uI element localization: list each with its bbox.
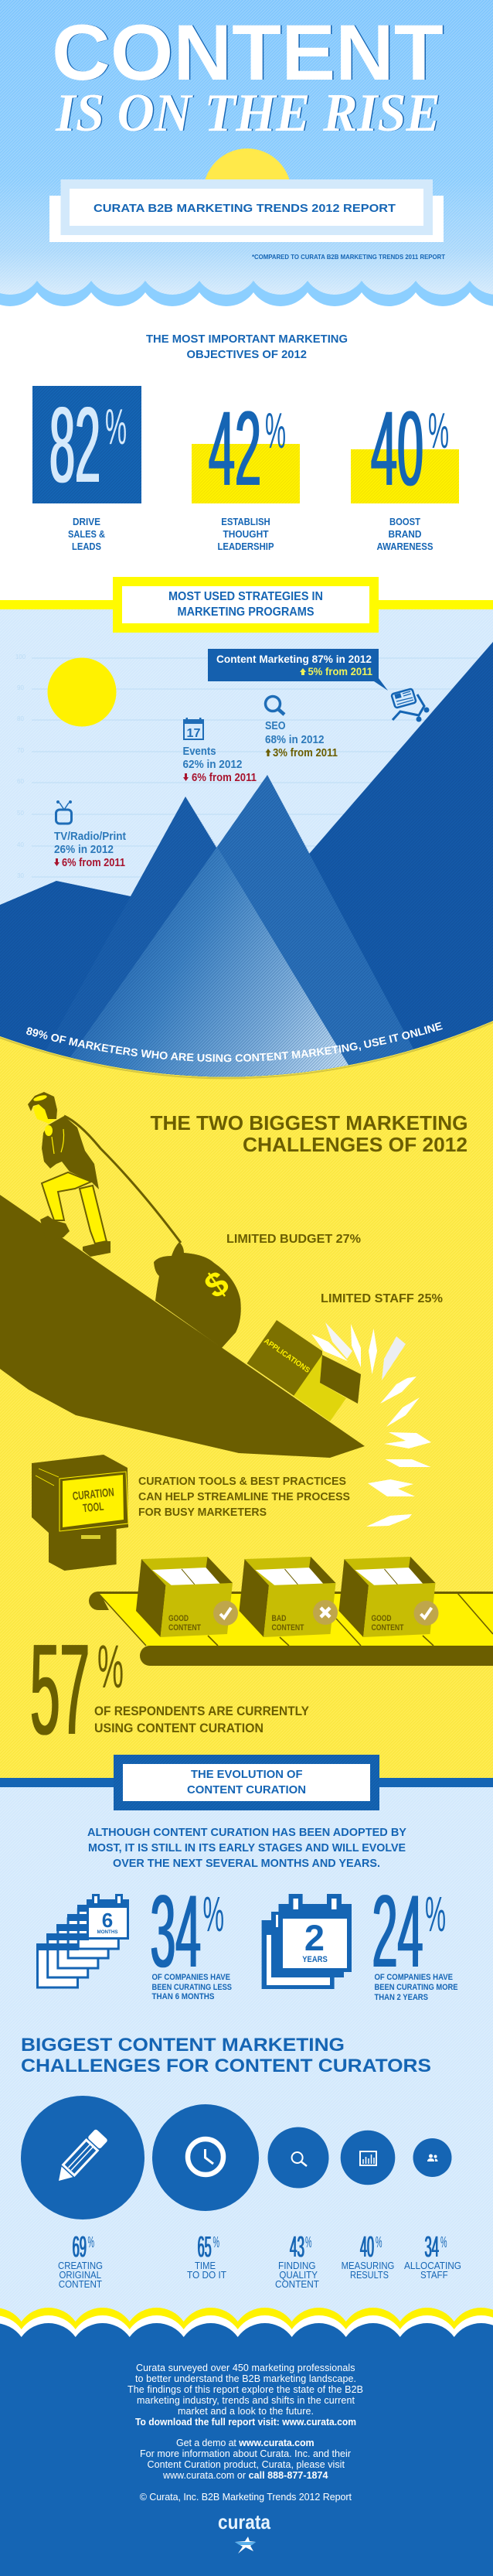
stat: finding quality content: CONTENT [275,2278,319,2290]
footer text: The findings of this report explore the state of the B2B [128,2384,363,2395]
stat: finding quality content: QUALITY [279,2269,318,2281]
section banner: evolution of content curation: CONTENT CURATION [187,1783,306,1796]
icon: curation tool kiosk [32,1455,128,1571]
text: curation tools help: FOR BUSY MARKETERS [138,1506,267,1519]
curved caption: 89% OF MARKETERS WHO ARE USING CONTENT MARKETING, USE IT ONLINE [26,1022,443,1063]
icon: rising sun [203,148,291,237]
stat: 34 percent: % [202,1886,224,1942]
icon: six months calendar stack [36,1894,129,1987]
box: good content: CONTENT [371,1623,404,1633]
chart axis labels: 30 [17,872,24,879]
chart axis labels: 60 [17,778,24,785]
label: limited staff: LIMITED STAFF 25% [321,1292,443,1305]
stat: measuring results: 40 [360,2231,374,2264]
chart axis labels: 40 [17,841,24,848]
icon: six months calendar stack: 6 [102,1909,113,1932]
footer text: to better understand the B2B marketing landscape. [135,2373,356,2384]
text: seo: 68% in 2012 [265,734,325,746]
heading: biggest content marketing challenges [21,2035,431,2076]
panel: evolution background [0,1783,493,2324]
footer text: To download the full report visit: www.curata.com [135,2417,356,2428]
text: less than six months: BEEN CURATING LESS [151,1983,232,1992]
footer text: www.curata.com or call 888-877-1874 [162,2470,328,2481]
chart axis labels: 100 [15,653,26,660]
icon: calendar 17: 17 [187,727,201,740]
footer text: Content Curation product, Curata, please visit [147,2459,345,2470]
label: boost brand awareness: BOOST [389,516,420,527]
callout: content marketing [208,649,388,691]
stat: creating original content: 69 [73,2231,87,2264]
stat: 42 percent: % [265,402,286,459]
text: curation tools help: CAN HELP STREAMLINE THE PROCESS [138,1491,350,1503]
stat: 40 percent: 40 [371,390,423,508]
stat: measuring results: MEASURING [342,2260,394,2271]
icon: yellow sun [48,657,116,727]
stat: measuring results [342,2231,394,2281]
stat: allocating staff: 34 [425,2231,439,2264]
stat: 82 percent [32,385,141,505]
stat: allocating staff: STAFF [420,2269,448,2281]
box: bad content: CONTENT [272,1623,304,1633]
stat: 34 percent [150,1875,232,2001]
stat: finding quality content: 43 [290,2231,304,2264]
text: less than six months: OF COMPANIES HAVE [151,1973,230,1982]
text: respondents using curation: OF RESPONDENTS ARE CURRENTLY [94,1704,309,1718]
icon: two years calendar stack: YEARS [302,1955,328,1964]
footnote: *COMPARED TO CURATA B2B MARKETING TRENDS 2011 REPORT [252,253,446,261]
stat: finding quality content [275,2231,319,2290]
label: boost brand awareness: BRAND [388,528,422,540]
stat: 42 percent [192,390,300,508]
illustration: man pulling rope [28,1092,181,1257]
text: less than six months: THAN 6 MONTHS [151,1992,215,2001]
text: tv radio print: 6% from 2011 [62,857,125,869]
footer text: marketing industry, trends and shifts in the current [137,2395,355,2406]
text: events: Events [182,746,216,758]
label: establish thought leadership: LEADERSHIP [218,541,274,552]
stat: 24 percent: 24 [372,1875,423,1989]
icon: pencil circle [21,2096,144,2219]
title: content: CONTENT [52,9,444,97]
illustration: flying papers [311,1322,431,1527]
chart axis labels: 50 [17,810,24,817]
text: evolution intro: ALTHOUGH CONTENT CURATION HAS BEEN ADOPTED BY [87,1826,406,1839]
icon: two years calendar stack: 2 [304,1917,325,1958]
icon: curation tool kiosk: CURATION [72,1486,114,1503]
section banner: evolution of content curation [0,1755,493,1810]
box: good content: GOOD [168,1614,189,1623]
box: good content: GOOD [371,1614,392,1623]
text: more than two years: OF COMPANIES HAVE [374,1973,453,1982]
text: seo [265,720,338,759]
text: evolution intro: MOST, IT IS STILL IN ITS EARLY STAGES AND WILL EVOLVE [88,1841,406,1854]
stat: 24 percent: % [425,1886,446,1942]
panel: most used strategies chart [0,609,493,1080]
panel: yellow section [0,1005,493,1783]
label: establish thought leadership: ESTABLISH [221,516,270,527]
stat: allocating staff: ALLOCATING [404,2260,461,2271]
text: tv radio print: 26% in 2012 [54,844,114,856]
stat: 82 percent: % [105,398,127,455]
stat: 82 percent: 82 [49,385,100,505]
icon: staff circle [413,2138,451,2177]
section banner: evolution of content curation: THE EVOLUTION OF [191,1768,303,1781]
icon: two years calendar stack [262,1894,352,1989]
icon: six months calendar stack: MONTHS [97,1930,117,1935]
stat: 40 percent [351,390,459,508]
box: good content [338,1557,439,1637]
logo: curata [218,2510,270,2554]
label: establish thought leadership [218,516,274,552]
label: drive sales and leads: SALES & [68,528,105,540]
heading: biggest content marketing challenges: CHALLENGES FOR CONTENT CURATORS [21,2056,431,2076]
stat: time to do it: TIME [195,2260,216,2271]
text: evolution intro [87,1826,406,1870]
report banner [49,179,444,242]
icon: clock circle [152,2104,259,2211]
stat: allocating staff: % [440,2234,447,2251]
section banner: most used strategies: MOST USED STRATEGIES IN [168,590,323,603]
text: less than six months [151,1973,232,2001]
stat: creating original content: % [88,2234,94,2251]
icon: magnifier circle [267,2127,329,2189]
text: seo: SEO [265,720,286,732]
footer text: © Curata, Inc. B2B Marketing Trends 2012 Report [140,2492,352,2503]
stat: creating original content: CONTENT [59,2278,102,2290]
heading: biggest content marketing challenges: BIGGEST CONTENT MARKETING [21,2035,345,2056]
heading: two biggest challenges [150,1111,468,1156]
text: seo: 3% from 2011 [273,747,338,759]
footer text: Get a demo at www.curata.com [176,2438,314,2448]
illustration: money bag: $ [197,1263,236,1306]
stat: time to do it [187,2231,226,2281]
stat: 57 percent: 57 [30,1618,90,1762]
text: more than two years: BEEN CURATING MORE [374,1983,457,1992]
title: content: CONTENT [53,9,445,97]
stat: finding quality content: % [305,2234,312,2251]
mountains [0,642,493,1076]
text: events: 6% from 2011 [192,772,257,784]
chart axis labels [15,653,26,879]
text: respondents using curation [94,1704,309,1735]
footer text: For more information about Curata. Inc. and their [140,2448,351,2459]
footer text: Curata surveyed over 450 marketing professionals [136,2363,355,2373]
callout: content marketing: 5% from 2011 [308,665,372,677]
heading: two biggest challenges: THE TWO BIGGEST MARKETING [150,1111,468,1134]
label: establish thought leadership: THOUGHT [223,528,269,540]
stat: time to do it: 65 [198,2231,212,2264]
title: is on the rise: IS ON THE RISE [55,84,440,143]
stat: 40 percent: % [428,402,449,459]
footer text [128,2363,363,2503]
text: events [182,746,257,784]
icon: results chart circle [341,2131,395,2185]
icon: calendar 17 [184,718,203,740]
box: bad content [240,1557,338,1637]
report banner: CURATA B2B MARKETING TRENDS 2012 REPORT [94,202,396,215]
box: bad content: BAD [272,1614,287,1623]
illustration: applications box [247,1320,361,1421]
stat: measuring results: RESULTS [350,2269,389,2281]
box: good content [136,1557,238,1637]
heading: two biggest challenges: CHALLENGES OF 2012 [243,1133,468,1156]
icon: newspaper on cart [392,689,430,722]
icon: magnifier [266,696,284,715]
stat: 57 percent: % [97,1632,124,1701]
text: events: 62% in 2012 [182,759,243,771]
stat: 24 percent [372,1875,457,2002]
illustration: money bag [154,1242,241,1348]
stat: allocating staff [404,2231,461,2281]
stat: creating original content: ORIGINAL [59,2269,101,2281]
icon: curation tool kiosk: TOOL [82,1500,104,1515]
stat: creating original content [58,2231,103,2290]
stat: time to do it: % [213,2234,219,2251]
panel: header sky [0,0,493,306]
text: tv radio print [54,831,126,869]
chart grid [32,658,478,877]
chart axis labels: 70 [17,747,24,754]
label: drive sales and leads: DRIVE [73,516,100,527]
text: tv radio print: TV/Radio/Print [54,831,126,843]
stat: creating original content: CREATING [58,2260,103,2271]
icon: television [56,800,72,824]
label: boost brand awareness [377,516,434,552]
stat: finding quality content: FINDING [278,2260,316,2271]
heading [146,333,348,361]
heading: THE MOST IMPORTANT MARKETING [146,333,348,346]
callout: content marketing: Content Marketing 87% in 2012 [216,653,372,665]
label: drive sales and leads: LEADS [72,541,101,552]
stat: 34 percent: 34 [150,1875,201,1989]
chart axis labels: 80 [17,715,24,722]
logo: curata: curata [218,2510,270,2533]
label: limited budget: LIMITED BUDGET 27% [226,1233,361,1246]
footer text: market and a look to the future. [178,2406,314,2417]
box: good content: CONTENT [168,1623,201,1633]
illustration: hill [0,1195,365,1458]
text: more than two years [374,1973,457,2002]
stat: measuring results: % [376,2234,382,2251]
text: more than two years: THAN 2 YEARS [374,1993,428,2002]
text: curation tools help: CURATION TOOLS & BEST PRACTICES [138,1476,346,1488]
title: is on the rise: IS ON THE RISE [56,84,442,143]
stat: 42 percent: 42 [209,390,261,508]
section banner: most used strategies [0,577,493,633]
label: boost brand awareness: AWARENESS [377,541,434,552]
text: evolution intro: OVER THE NEXT SEVERAL MONTHS AND YEARS. [113,1857,380,1870]
illustration: conveyor belt [89,1592,493,1666]
stat: 57 percent [30,1618,309,1762]
text: respondents using curation: USING CONTENT CURATION [94,1721,264,1735]
panel: footer with scalloped edge [0,2308,493,2576]
illustration: applications box: APPLICATIONS [262,1337,311,1375]
section banner: most used strategies: MARKETING PROGRAMS [178,606,314,619]
label: drive sales and leads [68,516,105,552]
text: curation tools help [138,1476,350,1519]
panel: marketing objectives [32,333,459,552]
heading: OBJECTIVES OF 2012 [187,348,307,361]
chart axis labels: 90 [17,684,24,691]
stat: time to do it: TO DO IT [187,2269,226,2281]
